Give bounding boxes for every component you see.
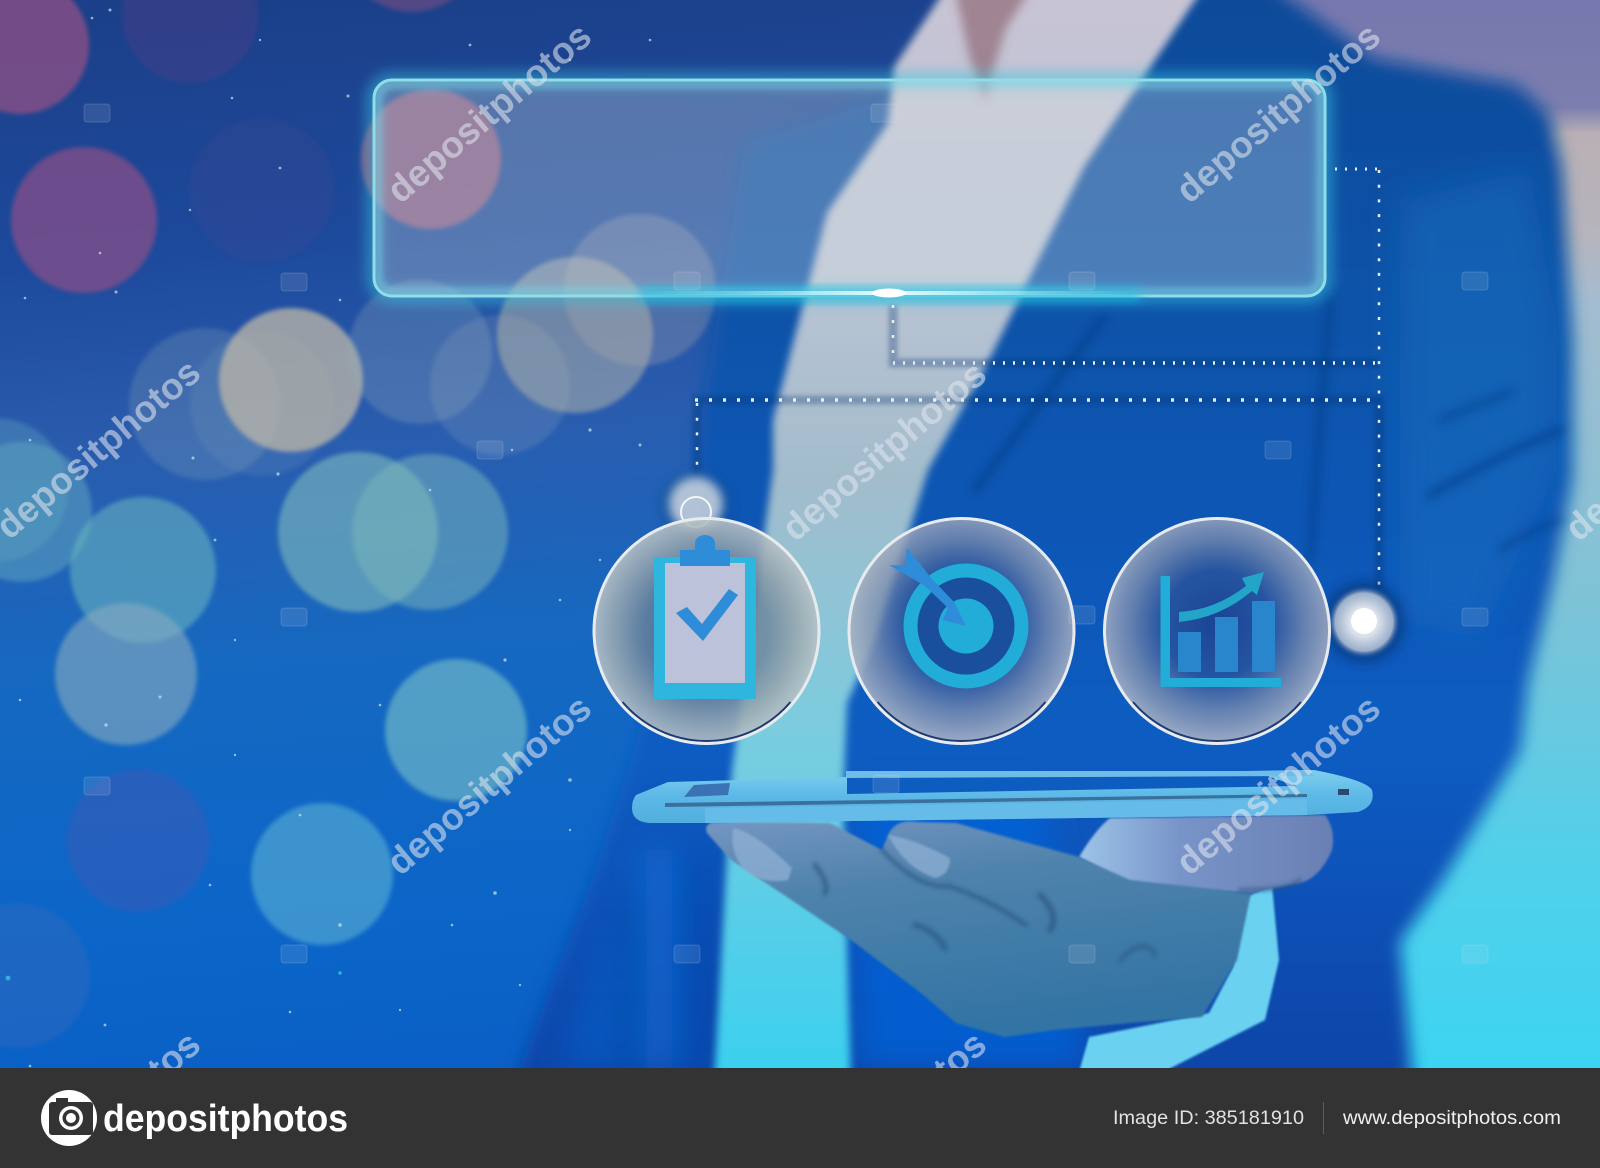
icon circle: growth chart [1104,518,1330,744]
tablet on hand [632,770,1373,823]
watermark text: depositphotos [774,353,994,549]
watermark text: depositphotos [379,15,599,211]
person: neck shadow [955,0,1030,100]
hand creases [815,850,1300,960]
connector node: left [660,471,732,543]
website url: www.depositphotos.com [1342,1108,1561,1129]
hand: fingers and palm [706,821,1251,1037]
icon: target with arrow [889,548,1028,688]
connector shadow [697,305,1379,590]
jacket folds and lapel shadow [975,300,1560,560]
connector node: right [1322,580,1406,664]
hand: upper palm [1079,815,1333,893]
person: shirt [714,0,1205,1085]
icon circle: target [849,518,1074,744]
fingernails [732,828,950,881]
person: jacket [513,0,1572,1085]
logo wordmark: depositphotos [103,1098,348,1140]
bokeh light circles [0,0,879,1048]
icon: depositphotos camera logo [41,1090,97,1146]
watermark text: depositphotos [1168,15,1388,211]
person: cuff and hand [706,815,1333,1072]
right side backdrop [1240,0,1600,1069]
watermark text: depositphotos [379,687,599,883]
callout box [374,80,1325,302]
icon: bar chart with rising arrow [1160,572,1281,687]
footer bar [0,1068,1600,1168]
dotted connector lines [695,169,1379,590]
dust speckles [6,8,651,1067]
watermark: camera icons [84,104,1488,963]
icon circle: clipboard [594,518,819,744]
jacket tonal shading [560,170,1556,1070]
image id: Image ID: 385181910 [1113,1108,1304,1129]
watermark text: depositphotos [1168,687,1388,883]
icon: clipboard with check [654,535,756,699]
